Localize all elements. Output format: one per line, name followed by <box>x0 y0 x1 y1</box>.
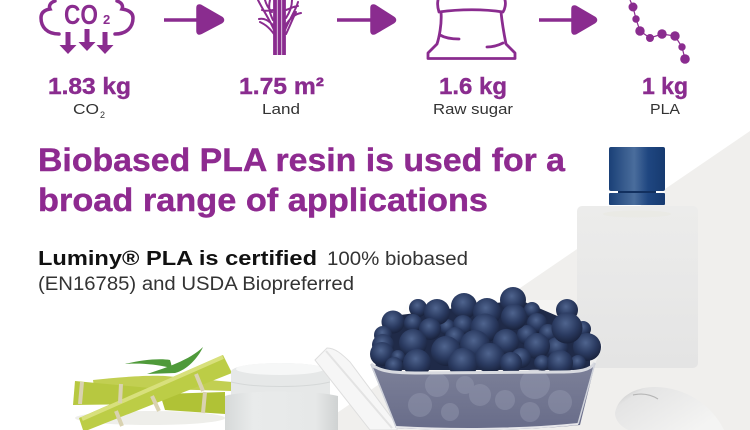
arrow 2 <box>337 6 394 33</box>
background: grey diagonal panel <box>312 131 750 430</box>
stat: land: Land <box>262 101 300 118</box>
product: perfume bottle <box>577 147 698 368</box>
tray rim <box>371 363 595 373</box>
stat: CO2 <box>48 73 131 120</box>
body text: 100% biobased <box>327 249 468 270</box>
heading: Biobased PLA resin is used for a <box>38 142 565 178</box>
product: blueberry tray <box>370 287 603 430</box>
heading <box>38 142 565 218</box>
stalk lower right <box>160 392 225 414</box>
stat: CO2: 2 <box>100 110 105 120</box>
berries <box>370 287 601 378</box>
tray ghost berries <box>408 369 572 422</box>
process flow row <box>41 0 690 120</box>
body text: Luminy® PLA is certified <box>38 248 317 270</box>
stat: land <box>239 73 324 118</box>
leaves <box>125 347 203 374</box>
product: sugar cane stalks <box>73 347 232 430</box>
stat: CO2: CO <box>73 101 99 118</box>
icon: PLA polymer chain <box>628 0 690 64</box>
stalk rings <box>80 374 205 426</box>
stat: raw sugar: Raw sugar <box>433 101 513 118</box>
arrow 1 <box>164 6 222 33</box>
stat: CO2: 1.83 kg <box>48 73 131 99</box>
stalk left <box>73 381 150 405</box>
tray body <box>371 364 595 430</box>
stat: raw sugar <box>433 73 513 118</box>
stat: land: 1.75 m² <box>239 73 324 99</box>
arrow 3 <box>539 7 596 33</box>
icon: sugar cane <box>258 0 301 55</box>
stalk front <box>79 355 232 430</box>
icon: CO2 cloud <box>41 0 133 54</box>
heading: broad range of applications <box>38 182 488 218</box>
stalk back <box>93 376 232 391</box>
body text: (EN16785) and USDA Biopreferred <box>38 274 354 295</box>
body text <box>38 248 468 295</box>
stat: raw sugar: 1.6 kg <box>439 73 507 99</box>
stat: PLA: 1 kg <box>642 73 688 99</box>
icon: CO2 cloud: 2 <box>103 12 110 27</box>
product: jar lid <box>315 348 397 430</box>
icon: raw sugar bag <box>428 0 515 58</box>
product: computer mouse <box>615 387 724 430</box>
stat: PLA <box>642 73 688 118</box>
product: cream jar <box>225 363 338 430</box>
stat: PLA: PLA <box>650 101 680 118</box>
